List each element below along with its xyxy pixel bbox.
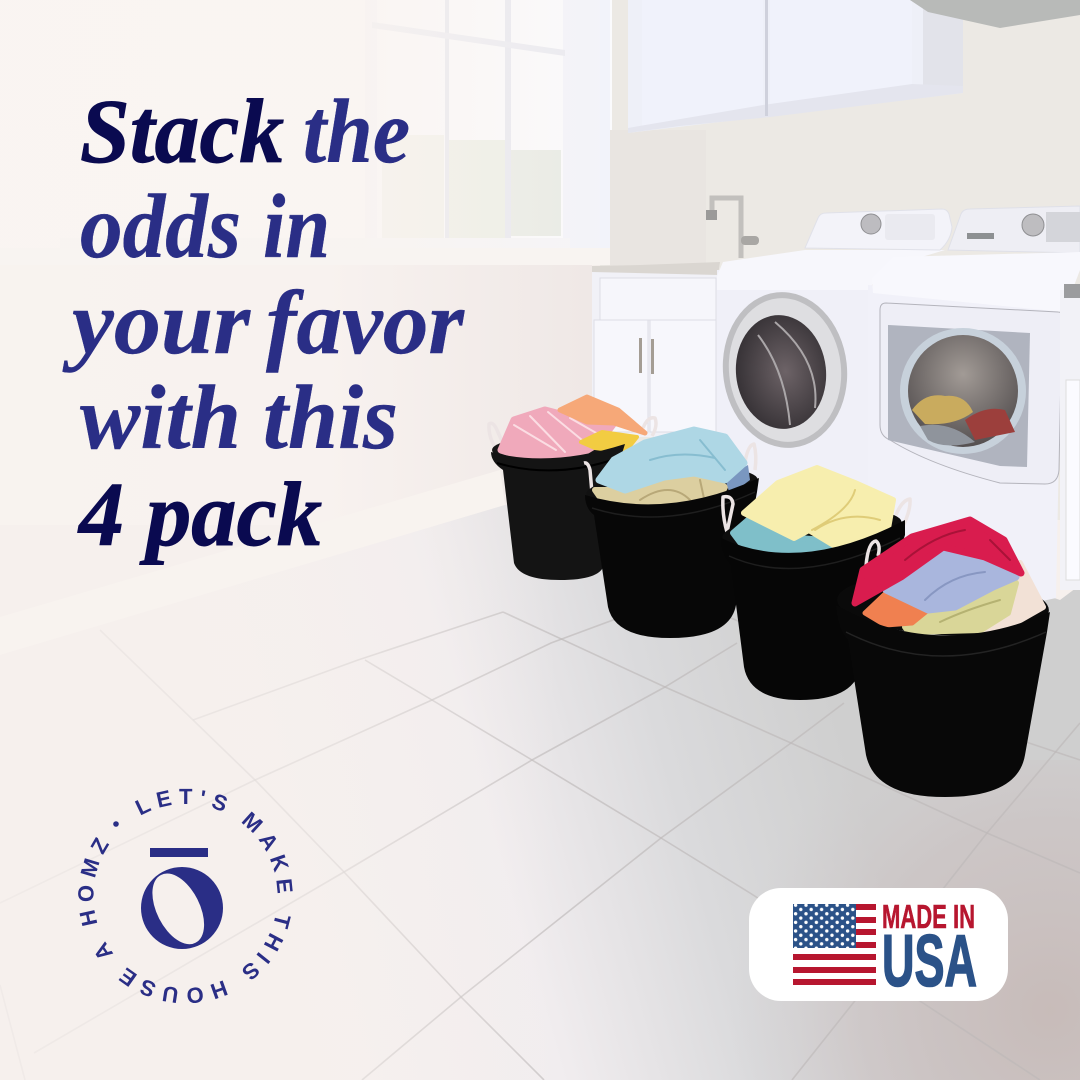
wall [600, 0, 1080, 520]
american flag [793, 903, 876, 986]
side appliance panel [1060, 284, 1080, 590]
dryer console [948, 206, 1080, 253]
line: 4 pack: pack [139, 464, 322, 565]
washer door [715, 286, 855, 454]
dryer [868, 206, 1080, 640]
four black tubs with laundry [489, 397, 1050, 797]
usa text: USA [882, 921, 977, 1002]
line: Stack the: the [303, 81, 410, 182]
line: with this: this [263, 367, 398, 468]
slogan dot [113, 821, 119, 827]
line: 4 pack: 4 [77, 464, 124, 565]
line: with this [80, 367, 398, 468]
line: Stack the [80, 81, 410, 182]
line: your favor: favor [266, 272, 466, 373]
logo mark: o with macron [141, 848, 223, 949]
circular slogan: LET'S MAKE THIS HOUSE A HOMZ [78, 788, 293, 1003]
floor fade overlay [0, 500, 560, 1080]
line: your favor: your [62, 272, 252, 373]
dryer door [880, 303, 1062, 484]
tile grout lines [0, 560, 1080, 1080]
wall shelf [910, 0, 1080, 28]
window fade overlay [0, 0, 600, 248]
window sill and lower wall [0, 248, 617, 655]
washer console [805, 209, 952, 250]
tub 2 with blue and beige laundry [584, 430, 759, 638]
line: with this: with [80, 367, 241, 468]
faucet [706, 198, 759, 258]
line: odds in: odds [80, 176, 241, 277]
wall cabinets [628, 0, 963, 133]
headline [62, 81, 466, 565]
circular logo badge [78, 788, 293, 1003]
line: odds in [80, 176, 330, 277]
sink cabinet [592, 262, 720, 437]
washer [715, 209, 952, 560]
line: Stack the: Stack [80, 81, 284, 182]
tub 1 with pink laundry [489, 397, 656, 580]
side wall panel [610, 130, 706, 268]
tub 3 with yellow and teal laundry [721, 468, 910, 700]
made in text: MADE IN [882, 898, 975, 935]
tub 4 with red and mixed laundry [836, 520, 1050, 797]
window [0, 0, 612, 250]
line: your favor [62, 272, 466, 373]
made in usa badge [749, 888, 1008, 1002]
line: odds in: in [263, 176, 330, 277]
floor [0, 480, 1080, 1080]
